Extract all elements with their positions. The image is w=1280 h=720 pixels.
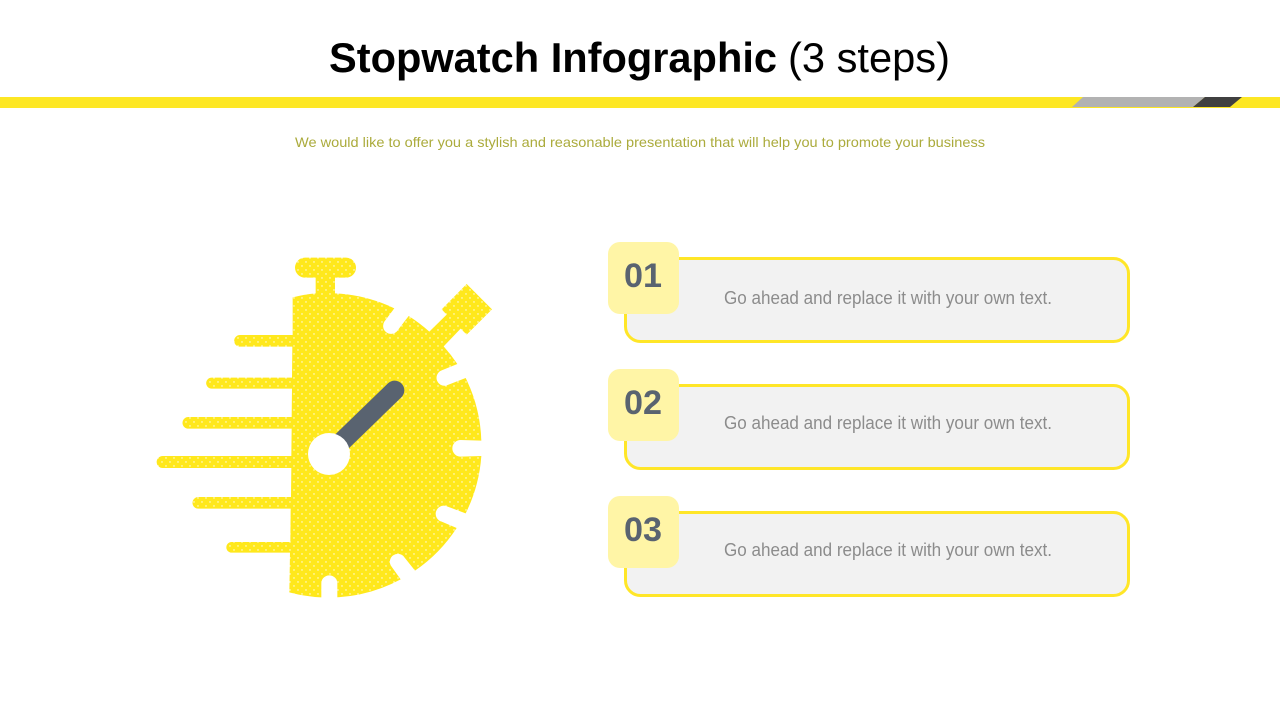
step 3 text: Go ahead and replace it with your own text.	[724, 540, 1052, 560]
step 1	[608, 242, 1128, 342]
step 2 panel	[626, 386, 1128, 468]
step 1 number: 01	[624, 257, 662, 295]
step 2 badge	[608, 369, 679, 441]
title: (3 steps)	[788, 34, 950, 81]
subtitle: We would like to offer you a stylish and reasonable presentation that will help you to promote your business	[295, 134, 985, 150]
stopwatch body with speed lines	[157, 258, 492, 597]
step 1 badge	[608, 242, 679, 314]
step 1 panel	[626, 258, 1128, 342]
header bar	[0, 97, 1280, 108]
step 3 panel	[626, 512, 1128, 596]
stopwatch hand	[329, 390, 395, 454]
step 1 text: Go ahead and replace it with your own text.	[724, 288, 1052, 308]
step 3	[608, 496, 1128, 596]
title: Stopwatch Infographic	[329, 34, 777, 81]
stopwatch illustration	[157, 258, 492, 597]
step 2 text: Go ahead and replace it with your own text.	[724, 413, 1052, 433]
step 2	[608, 369, 1128, 468]
step 3 badge	[608, 496, 679, 568]
hand pivot	[308, 433, 350, 475]
step 2 number: 02	[624, 384, 662, 422]
step 3 number: 03	[624, 511, 662, 549]
